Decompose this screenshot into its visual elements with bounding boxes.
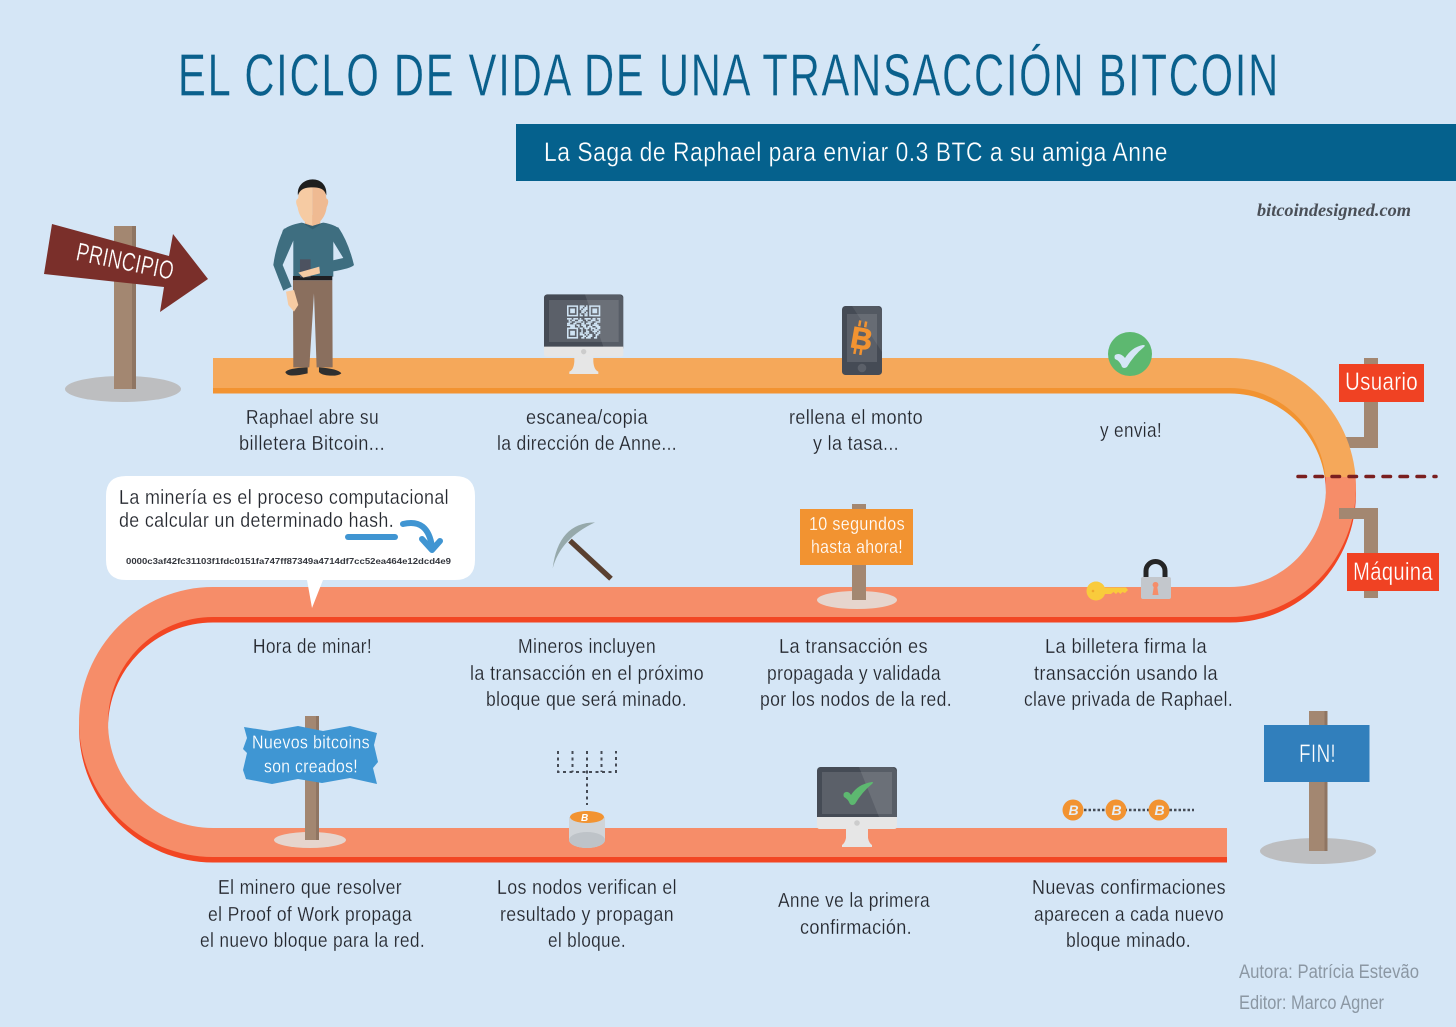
credits: author and editor: Editor: Marco Agner: [1239, 993, 1385, 1014]
sign: Usuario: [1339, 364, 1424, 402]
caption: Raphael abre su billetera: Raphael abre su: [246, 406, 379, 429]
sign: 10 segundos: 10 segundos: [809, 513, 905, 534]
caption: minero propaga: El minero que resolver: [218, 876, 402, 899]
caption: minero propaga: el nuevo bloque para la red.: [200, 929, 425, 952]
sign: PRINCIPIO: [44, 224, 208, 402]
sign: FIN: [1260, 711, 1376, 864]
sign: 10 segundos: [800, 504, 913, 609]
callout: mining explanation: de calcular un determinado hash.: [119, 509, 394, 532]
icon: pickaxe: [553, 522, 611, 579]
caption: Mineros incluyen: [470, 635, 704, 711]
icon: chain of bitcoins: B: [1154, 802, 1165, 818]
caption: escanea la dirección: la dirección de Anne...: [497, 432, 677, 455]
caption: nodos verifican: resultado y propagan: [500, 903, 674, 926]
caption: Mineros incluyen: Mineros incluyen: [518, 635, 656, 658]
caption: Raphael abre su billetera: [239, 406, 385, 455]
caption: rellena el monto: rellena el monto: [789, 406, 923, 429]
caption: nodos verifican: el bloque.: [548, 929, 626, 952]
caption: billetera firma: La billetera firma la: [1045, 635, 1207, 658]
caption: nuevas confirmaciones: aparecen a cada nuevo: [1034, 903, 1224, 926]
sign: Nuevos bitcoins: son creados!: [264, 756, 358, 776]
caption: minero propaga: [200, 876, 425, 952]
subtitle banner: [516, 124, 1456, 181]
sign: Usuario: Usuario: [1345, 368, 1418, 396]
icon: chain of bitcoins: B: [1112, 802, 1122, 818]
caption: escanea la dirección: escanea/copia: [526, 406, 648, 429]
caption: Anne ve confirmación: Anne ve la primera: [778, 889, 930, 912]
icon: chain of bitcoins: B: [1068, 802, 1079, 818]
website credit: bitcoindesigned.com: [1257, 200, 1411, 220]
credits: author and editor: Autora: Patrícia Estevão: [1239, 962, 1419, 983]
sign: PRINCIPIO: PRINCIPIO: [74, 236, 177, 286]
caption: billetera firma: [1024, 635, 1233, 711]
icon: key and padlock: [1086, 562, 1171, 600]
icon: Raphael standing: [273, 179, 354, 376]
credits: author and editor: [1239, 962, 1419, 1014]
sign: Nuevos bitcoins: [243, 716, 378, 848]
sign: Máquina: Máquina: [1353, 558, 1433, 586]
caption: Anne ve confirmación: [778, 889, 930, 939]
caption: Raphael abre su billetera: billetera Bitcoin...: [239, 432, 385, 455]
caption: transacción propagada: propagada y validada: [767, 662, 941, 685]
sign: Máquina: [1339, 508, 1439, 598]
caption: transacción propagada: La transacción es: [779, 635, 928, 658]
caption: billetera firma: transacción usando la: [1034, 662, 1218, 685]
road: user section (orange): [213, 358, 1356, 477]
caption: billetera firma: clave privada de Raphael.: [1024, 688, 1233, 711]
subtitle banner: La Saga de Raphael para enviar 0.3 BTC a su amiga Anne: [544, 137, 1168, 167]
caption: rellena el monto: [789, 406, 923, 455]
caption: nuevas confirmaciones: bloque minado.: [1066, 929, 1191, 952]
callout: mining explanation: La minería es el proceso computacional: [119, 486, 449, 509]
sign: 10 segundos: hasta ahora!: [811, 536, 903, 557]
icon: merkle tree and bitcoin block: B: [581, 813, 589, 824]
icon: monitor with QR code: [544, 294, 623, 374]
icon: green check: [1108, 332, 1152, 376]
divider: user and machine boundary: [1298, 475, 1436, 478]
caption: minero propaga: el Proof of Work propaga: [208, 903, 412, 926]
icon: monitor with check: [817, 767, 897, 847]
caption: Mineros incluyen: la transacción en el próximo: [470, 662, 704, 685]
caption: Mineros incluyen: bloque que será minado.: [486, 688, 687, 711]
icon: merkle tree and bitcoin block: [558, 751, 616, 848]
caption: y envia: y envia!: [1100, 419, 1162, 442]
caption: transacción propagada: por los nodos de la red.: [760, 688, 952, 711]
icon: chain of bitcoins: [1062, 800, 1194, 820]
caption: transacción propagada: [760, 635, 952, 711]
caption: nuevas confirmaciones: Nuevas confirmaciones: [1032, 876, 1226, 899]
sign: FIN: FIN!: [1299, 740, 1336, 768]
caption: nodos verifican: Los nodos verifican el: [497, 876, 677, 899]
signpost: Usuario post: [1338, 358, 1378, 448]
icon: phone with bitcoin symbol: B: [848, 321, 875, 358]
caption: nodos verifican: [497, 876, 677, 952]
callout: mining explanation: [106, 476, 475, 608]
caption: nuevas confirmaciones: [1032, 876, 1226, 952]
caption: Hora de minar: Hora de minar!: [253, 635, 372, 658]
caption: rellena el monto: y la tasa...: [813, 432, 899, 455]
caption: Anne ve confirmación: confirmación.: [800, 916, 912, 939]
caption: escanea la dirección: [497, 406, 677, 455]
icon: phone with bitcoin symbol: [842, 306, 882, 375]
sign: Nuevos bitcoins: Nuevos bitcoins: [252, 732, 370, 752]
road: machine section (salmon): [79, 477, 1356, 862]
callout: mining explanation: 0000c3af42fc31103f1fdc0151fa747ff87349a4714df7cc52ea464e12dcd4e9: [126, 557, 452, 566]
